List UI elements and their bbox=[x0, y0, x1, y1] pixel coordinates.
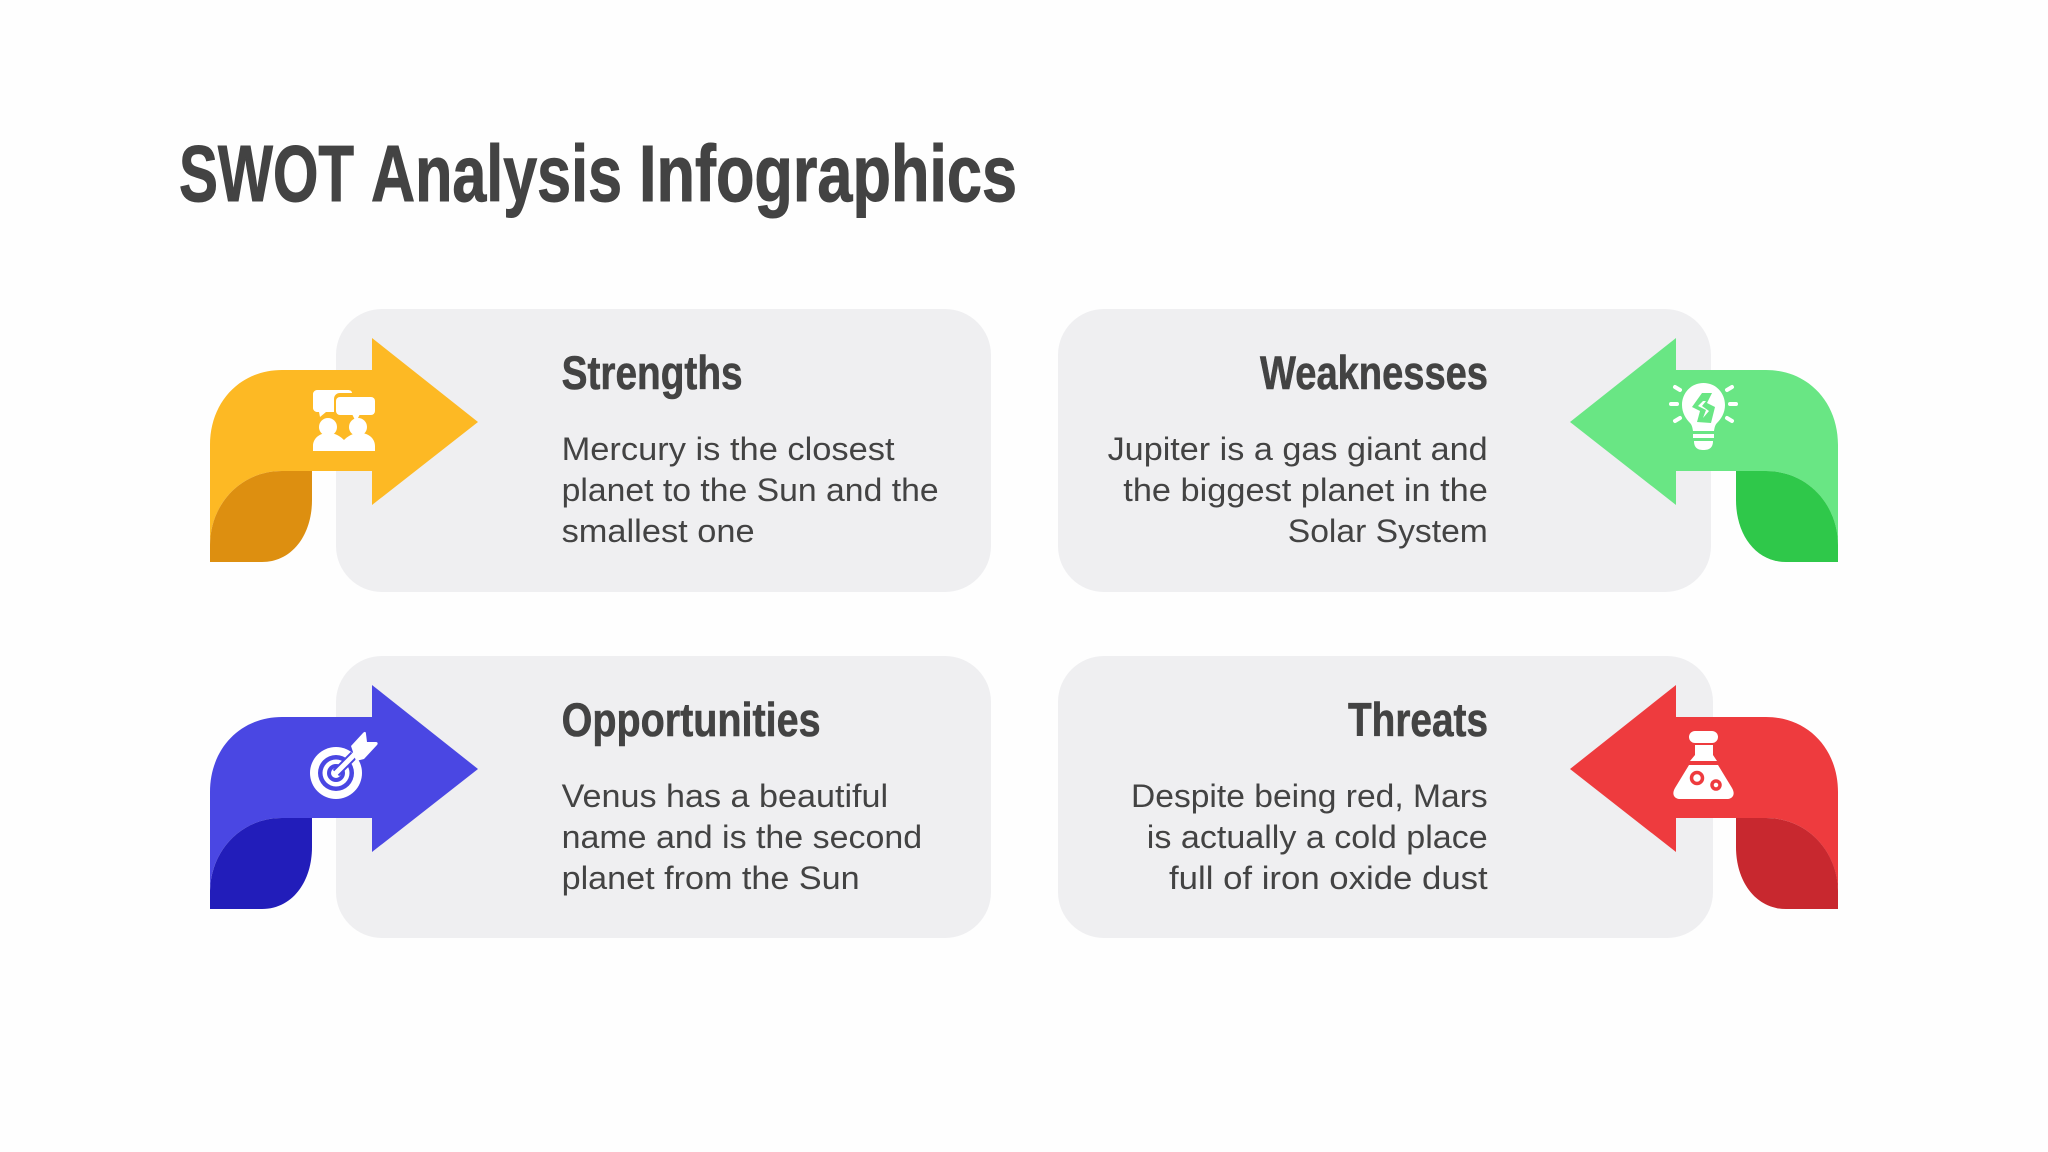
body text: is actually a cold place bbox=[1147, 819, 1488, 855]
title bbox=[179, 129, 1017, 218]
title: Infographics bbox=[639, 129, 1017, 218]
card background bbox=[336, 656, 991, 938]
card background bbox=[1058, 656, 1713, 938]
body text: Venus has a beautiful bbox=[562, 778, 888, 814]
icon: light bulb bbox=[1671, 383, 1736, 450]
heading: Opportunities bbox=[562, 693, 821, 746]
body text: Solar System bbox=[1288, 513, 1488, 549]
icon: chemistry flask bbox=[1673, 731, 1734, 799]
card background bbox=[336, 309, 991, 592]
body text: full of iron oxide dust bbox=[1169, 860, 1488, 896]
panel: strengths bbox=[210, 309, 991, 592]
body text: the biggest planet in the bbox=[1123, 472, 1488, 508]
panel: weaknesses bbox=[1058, 309, 1838, 592]
yellow arrow bbox=[210, 338, 478, 562]
panel: opportunities bbox=[210, 656, 991, 938]
heading: Weaknesses bbox=[1260, 346, 1488, 399]
panel: threats bbox=[1058, 656, 1838, 938]
body text bbox=[1108, 431, 1488, 549]
icon: target with arrow bbox=[310, 732, 378, 799]
body text bbox=[562, 431, 939, 549]
title: SWOT bbox=[179, 129, 354, 218]
green arrow bbox=[1570, 338, 1838, 562]
title: Analysis bbox=[371, 129, 622, 218]
body text: name and is the second bbox=[562, 819, 922, 855]
body text: planet to the Sun and the bbox=[562, 472, 939, 508]
red arrow bbox=[1570, 685, 1838, 909]
icon: people talking bbox=[313, 390, 375, 451]
heading: Threats bbox=[1348, 693, 1488, 746]
body text: planet from the Sun bbox=[562, 860, 860, 896]
body text: smallest one bbox=[562, 513, 755, 549]
heading: Strengths bbox=[562, 346, 743, 399]
body text: Jupiter is a gas giant and bbox=[1108, 431, 1488, 467]
body text bbox=[562, 778, 922, 896]
body text bbox=[1131, 778, 1488, 896]
body text: Despite being red, Mars bbox=[1131, 778, 1488, 814]
blue arrow bbox=[210, 685, 478, 909]
body text: Mercury is the closest bbox=[562, 431, 895, 467]
card background bbox=[1058, 309, 1711, 592]
